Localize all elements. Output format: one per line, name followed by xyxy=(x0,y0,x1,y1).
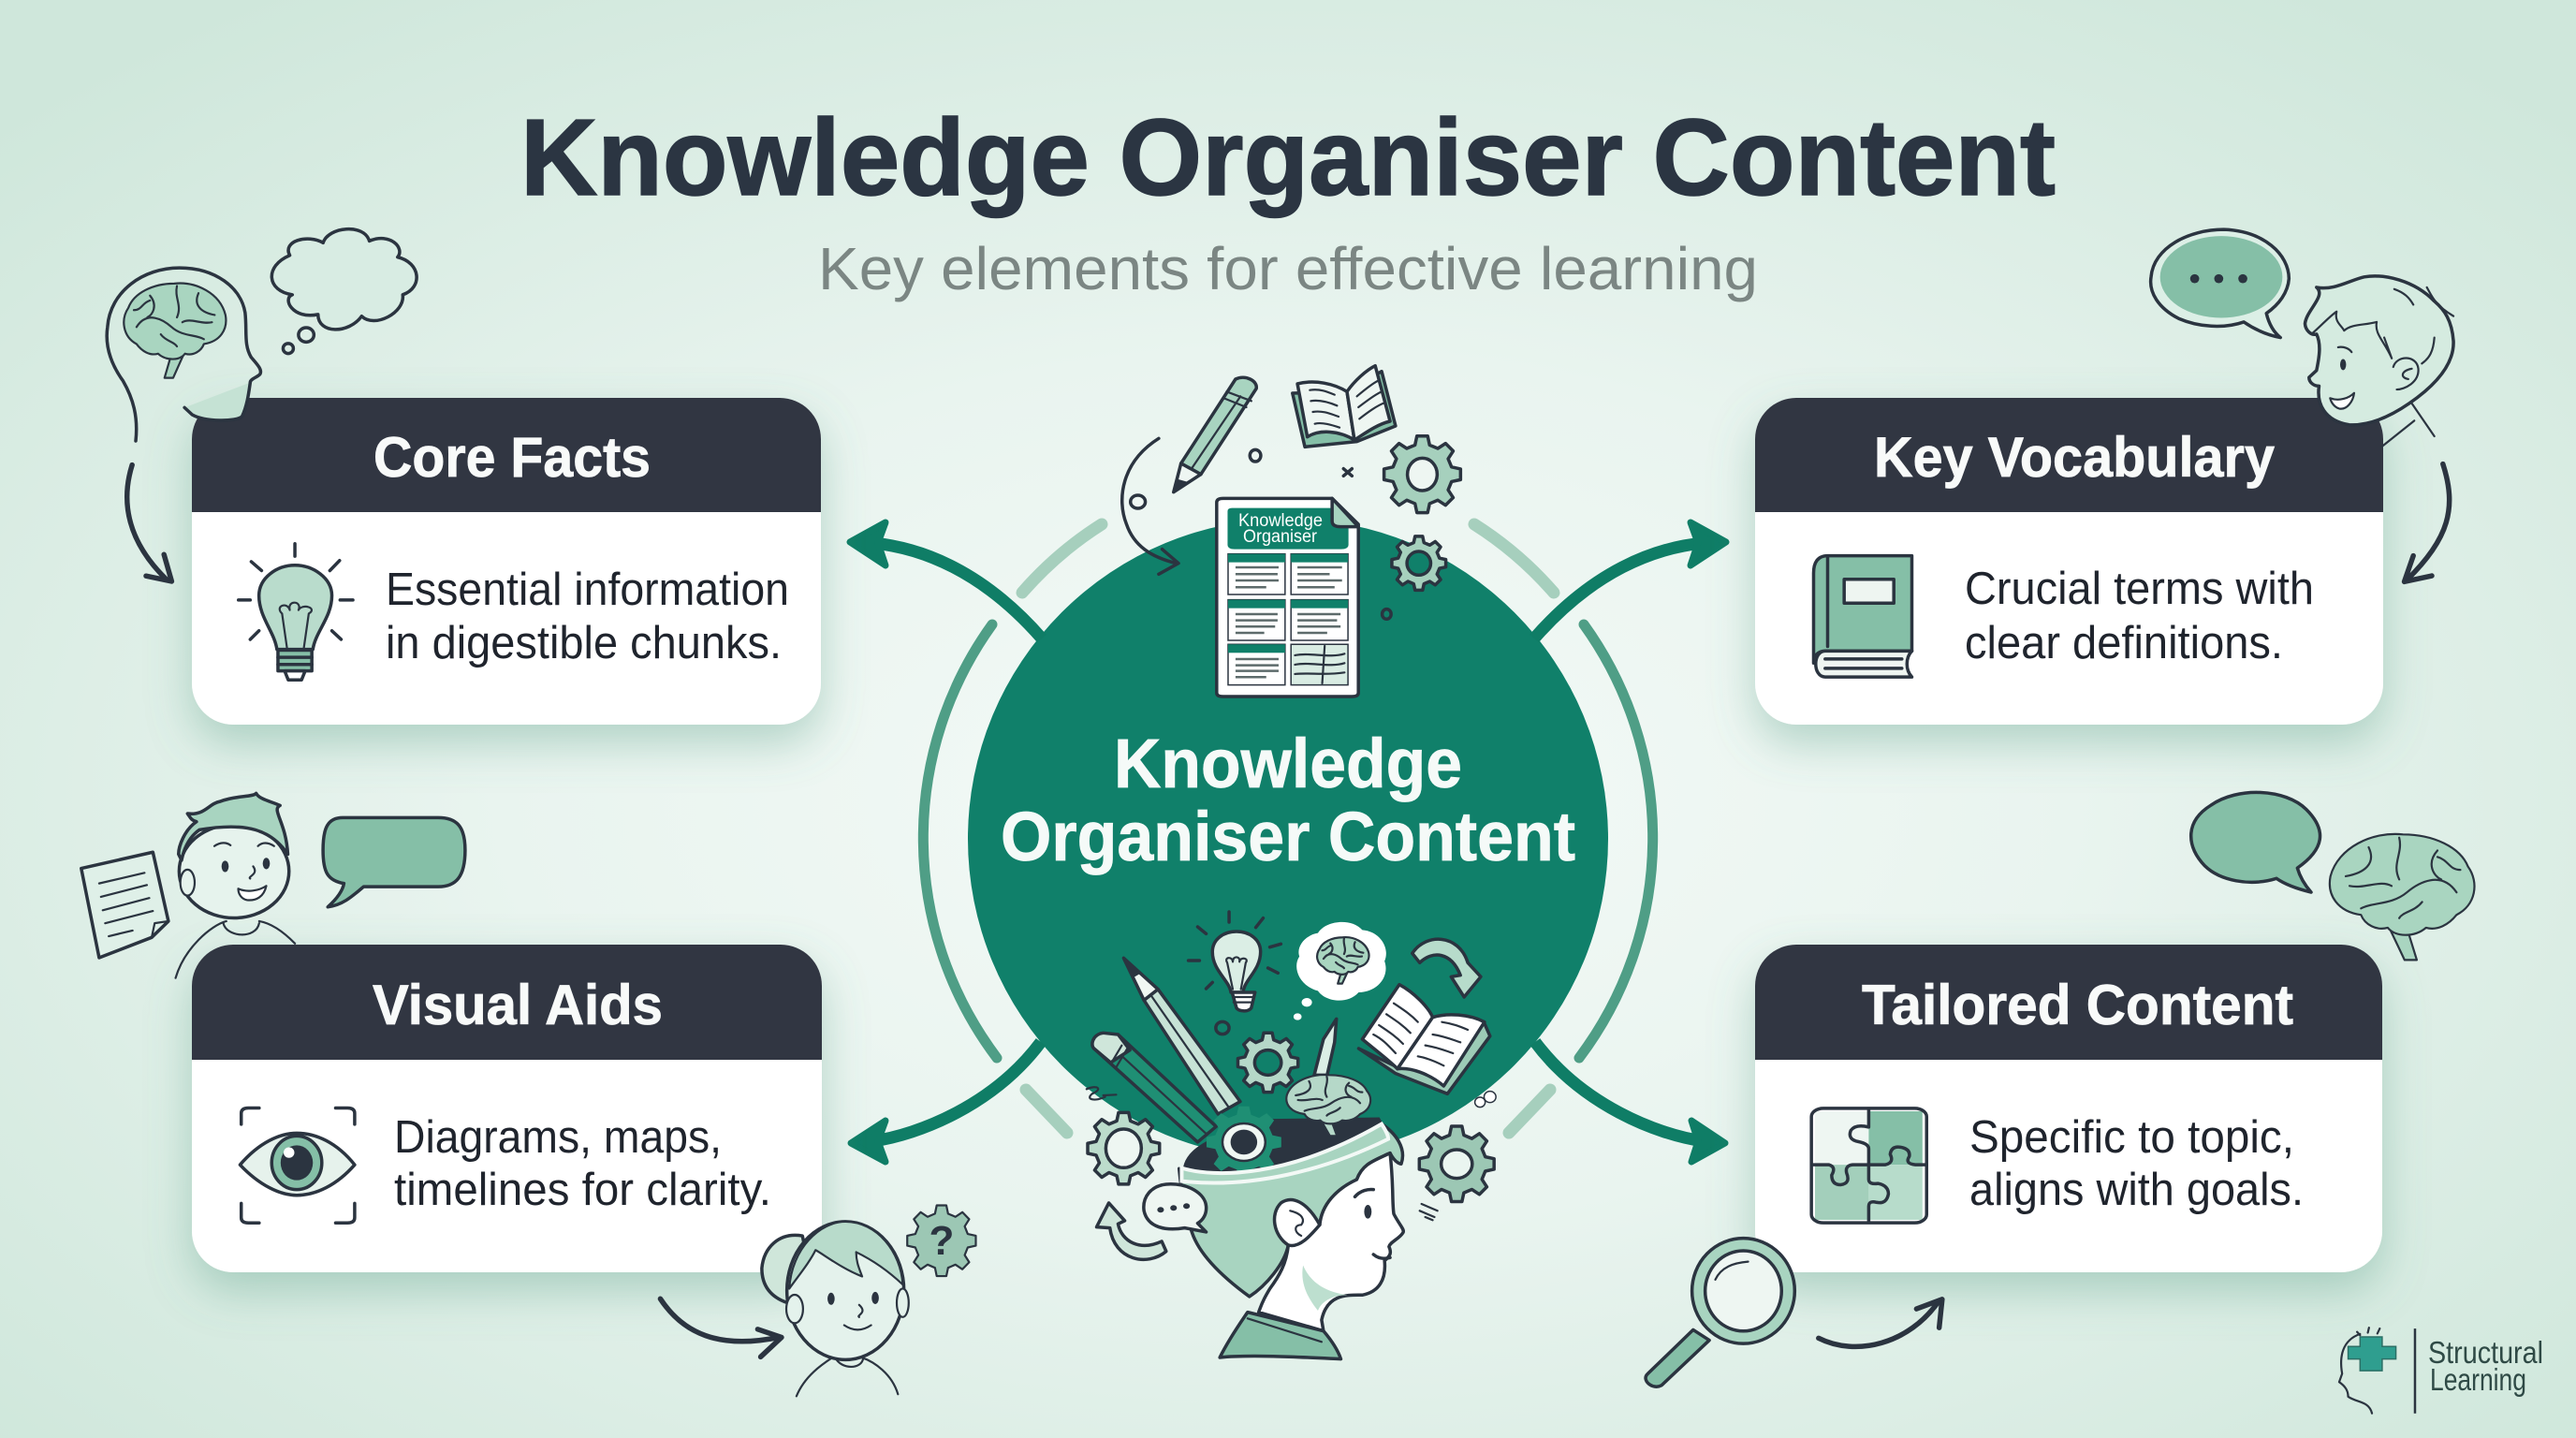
lightbulb xyxy=(1189,912,1281,1011)
head hair xyxy=(1179,1123,1402,1297)
curved arrow top xyxy=(1412,939,1481,997)
note lines xyxy=(99,873,168,937)
visual aids body text: Diagrams, maps, xyxy=(394,1112,722,1163)
bubble dots xyxy=(2190,274,2247,283)
tailored content body text: Specific to topic, xyxy=(1969,1112,2294,1163)
visual aids header bar xyxy=(192,945,822,1060)
arrow: magnifier to card xyxy=(1819,1299,1942,1346)
thought dots xyxy=(283,328,314,354)
illustration: head with brain and thought cloud xyxy=(107,229,417,581)
icon: green book xyxy=(1813,556,1911,677)
curved arrow to document xyxy=(1122,438,1178,574)
pencil light xyxy=(1123,958,1240,1114)
brain right xyxy=(2330,834,2475,960)
open book xyxy=(1358,985,1490,1093)
thought cloud xyxy=(271,229,417,330)
panel: key vocabulary xyxy=(1755,398,2383,725)
small circles and cross xyxy=(1250,449,1391,619)
pencil xyxy=(1174,377,1256,492)
visual aids heading: Visual Aids xyxy=(373,974,663,1036)
dark head opening xyxy=(1185,1119,1382,1172)
title: Knowledge Organiser Content xyxy=(520,96,2056,218)
panel: tailored content xyxy=(1755,945,2382,1272)
tailored content heading: Tailored Content xyxy=(1862,974,2293,1036)
tailored content body text: aligns with goals. xyxy=(1969,1165,2304,1215)
panel: visual aids xyxy=(192,945,822,1272)
icon: puzzle xyxy=(1811,1108,1926,1223)
boy head xyxy=(179,825,289,917)
doc cells xyxy=(1228,554,1348,685)
key vocabulary body text: clear definitions. xyxy=(1965,618,2283,668)
core facts body text: in digestible chunks. xyxy=(386,618,782,668)
note page xyxy=(81,852,168,958)
small pencil xyxy=(1314,1019,1337,1075)
thought cloud with brain xyxy=(1216,922,1386,1034)
centre ring arcs xyxy=(923,524,1653,1133)
eye and mouth xyxy=(1354,1189,1390,1258)
key vocabulary header bar xyxy=(1755,398,2383,512)
logo icon xyxy=(2339,1328,2396,1414)
boy face xyxy=(181,843,274,901)
curved arrow bottom xyxy=(1097,1203,1166,1259)
subtitle: Key elements for effective learning xyxy=(818,235,1758,302)
question mark: ? xyxy=(929,1218,954,1264)
gear left xyxy=(1088,1112,1160,1184)
mid gear xyxy=(1237,1033,1298,1093)
icon: eye in brackets xyxy=(240,1108,355,1223)
logo wordmark: Learning xyxy=(2430,1362,2526,1397)
head outline xyxy=(107,268,260,441)
gear small xyxy=(1392,536,1446,590)
shirt xyxy=(1220,1313,1340,1359)
speech bubble rectangular xyxy=(323,817,465,907)
core facts header bar xyxy=(192,398,821,512)
panel: core facts xyxy=(192,398,821,725)
document xyxy=(1217,498,1358,697)
ear xyxy=(1275,1200,1320,1245)
arrow: to girl xyxy=(660,1299,782,1357)
pencil dark green xyxy=(1092,1033,1216,1142)
mini title in document: Knowledge xyxy=(1238,511,1323,531)
gear large xyxy=(1384,436,1460,513)
icon: lightbulb xyxy=(239,544,353,680)
girl figure xyxy=(762,1222,909,1396)
scalp rim xyxy=(1181,1124,1388,1183)
logo wordmark: Structural xyxy=(2428,1335,2543,1370)
magnifier xyxy=(1646,1239,1794,1387)
illustration: boy with speech bubble xyxy=(2151,229,2453,581)
face xyxy=(1259,1153,1403,1331)
brain xyxy=(124,284,226,378)
speech bubble xyxy=(2151,229,2289,338)
illustration: open head with ideas xyxy=(1087,912,1496,1359)
gear with question xyxy=(907,1206,975,1276)
arrow: boy to card xyxy=(2405,464,2450,581)
boy figure xyxy=(2305,276,2453,447)
neck shadow xyxy=(1302,1266,1348,1311)
arrow: to Core Facts xyxy=(850,522,1042,638)
tailored content header bar xyxy=(1755,945,2382,1060)
boy body xyxy=(176,921,295,978)
visual aids body text: timelines for clarity. xyxy=(394,1165,771,1215)
bubble fill xyxy=(2160,236,2282,317)
illustration: bubble, brain, magnifier xyxy=(1646,792,2475,1414)
illustration: boy with note and speech bubble xyxy=(81,793,975,1396)
illustration: document with pencil, book and gears xyxy=(1122,366,1460,697)
inner gear xyxy=(1207,1107,1281,1178)
open book xyxy=(1293,366,1396,447)
arrow: to Key Vocabulary xyxy=(1534,522,1726,638)
gear right xyxy=(1419,1126,1494,1202)
core facts body text: Essential information xyxy=(386,565,789,615)
arrow: head to card xyxy=(127,465,171,581)
central knowledge organiser label: Knowledge xyxy=(1114,725,1462,802)
key vocabulary heading: Key Vocabulary xyxy=(1874,426,2276,489)
mini title in document: Organiser xyxy=(1243,527,1318,547)
arrow: to Tailored Content xyxy=(1535,1042,1725,1162)
small marks xyxy=(1087,1087,1496,1342)
speech bubble round xyxy=(2191,792,2320,892)
head brain xyxy=(1286,1075,1370,1136)
key vocabulary body text: Crucial terms with xyxy=(1965,564,2314,614)
arrow: to Visual Aids xyxy=(851,1042,1041,1162)
central circle xyxy=(968,519,1608,1159)
logo divider xyxy=(2414,1328,2416,1414)
core facts heading: Core Facts xyxy=(373,426,651,489)
central knowledge organiser label: Organiser Content xyxy=(1001,798,1575,875)
boy hair xyxy=(179,793,287,860)
speech bubble small xyxy=(1144,1184,1207,1232)
